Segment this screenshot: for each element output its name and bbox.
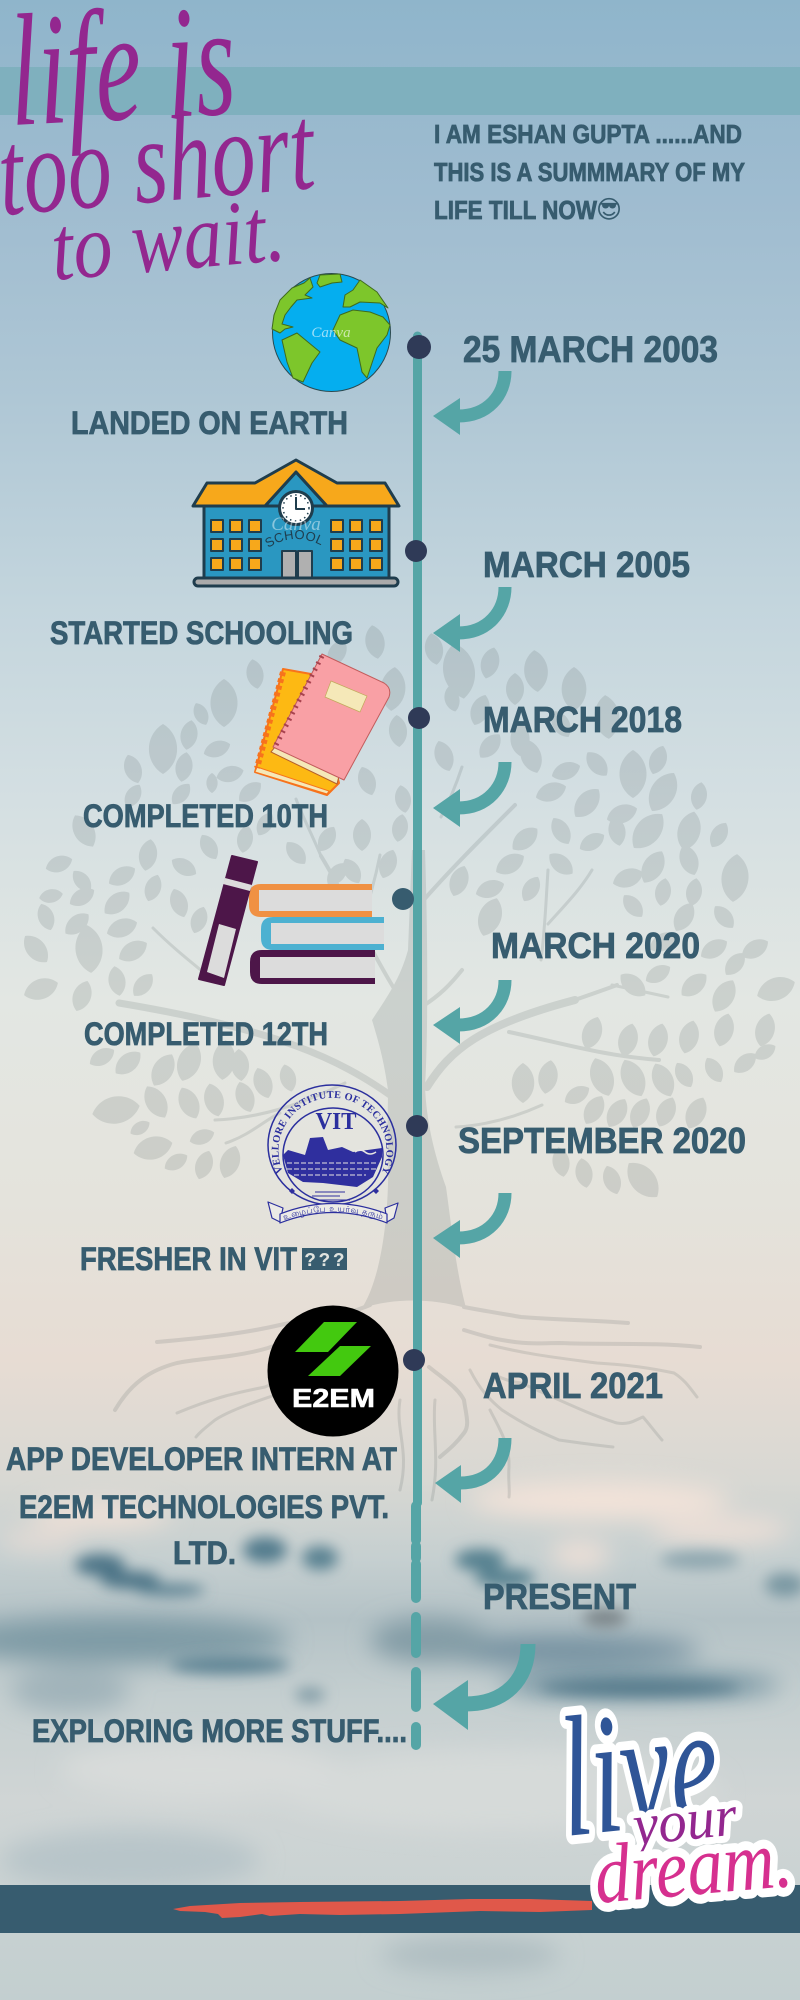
label: app developer intern: LTD. — [173, 1535, 236, 1571]
arrow: 2021 — [435, 1438, 505, 1503]
icon: VIT logo: VELLORE INSTITUTE OF TECHNOLOGY — [272, 1091, 394, 1175]
icon: school: SCHOOL — [265, 530, 322, 547]
tree trunk — [362, 850, 466, 1308]
arrow: present — [433, 1644, 528, 1730]
tree leaves — [18, 624, 799, 1205]
timeline line — [416, 336, 418, 1745]
tree branches — [119, 767, 668, 1143]
intro text: THIS IS A SUMMMARY OF MY — [434, 157, 745, 187]
arrow: 2020 — [433, 980, 505, 1044]
label: exploring more stuff: EXPLORING MORE STUFF.... — [32, 1713, 407, 1749]
top teal band — [0, 67, 800, 115]
date: March 2018: MARCH 2018 — [483, 699, 682, 740]
icon: VIT logo — [267, 1084, 399, 1224]
date: April 2021: APRIL 2021 — [483, 1365, 663, 1406]
icon: E2EM logo — [268, 1306, 398, 1436]
icon: globe — [272, 274, 390, 392]
icon: VIT logo: உழைப்பே உயர்வு தரும் — [284, 1206, 382, 1220]
intro text: 😎 — [596, 195, 622, 224]
sticker: live your dream: your — [625, 1782, 740, 1858]
bottom bar — [0, 1885, 800, 1933]
date: March 2005: MARCH 2005 — [483, 544, 690, 585]
arrow: 2003 — [433, 371, 505, 435]
icon: VIT logo: VIT — [316, 1109, 356, 1135]
label: fresher in VIT: FRESHER IN VIT — [80, 1241, 297, 1277]
label: completed 12th: COMPLETED 12TH — [84, 1016, 328, 1052]
date: present: PRESENT — [483, 1576, 636, 1617]
arrow: 2018 — [433, 762, 505, 827]
icon: school — [192, 458, 401, 588]
label: completed 10th: COMPLETED 10TH — [83, 798, 328, 834]
red brush stroke — [173, 1899, 592, 1918]
icon: E2EM logo: E2EM — [292, 1383, 375, 1413]
label: landed on earth: LANDED ON EARTH — [71, 405, 348, 441]
date: March 2020: MARCH 2020 — [491, 925, 700, 966]
date: September 2020: SEPTEMBER 2020 — [458, 1120, 746, 1161]
icon: notebooks — [255, 654, 390, 795]
intro text: I AM ESHAN GUPTA ......AND — [434, 119, 742, 149]
label: fresher in VIT: ??? — [304, 1250, 344, 1272]
label: app developer intern — [6, 1441, 397, 1571]
timeline dot: March 2018 — [408, 707, 430, 729]
title: life is too short to wait: too short — [0, 80, 321, 242]
intro text: LIFE TILL NOW — [434, 195, 597, 225]
title: life is too short to wait — [0, 0, 321, 300]
icon: stack of books — [199, 856, 384, 985]
arrow: 2005 — [433, 587, 505, 652]
timeline dot: 25 March 2003 — [407, 335, 431, 359]
icon: school: Canva — [271, 514, 321, 535]
arrow: 2020 September — [433, 1193, 505, 1258]
timeline dot: March 2020 — [392, 888, 414, 910]
label: app developer intern: APP DEVELOPER INTERN AT — [6, 1441, 397, 1477]
label: app developer intern: E2EM TECHNOLOGIES PVT. — [19, 1489, 389, 1525]
background tree — [18, 624, 799, 1500]
background: clouds — [0, 1482, 800, 1973]
date: 25 March 2003: 25 MARCH 2003 — [463, 329, 718, 370]
intro text — [434, 119, 745, 225]
tree roots — [115, 1305, 700, 1500]
icon: globe: Canva — [311, 325, 351, 341]
timeline dot: April 2021 — [403, 1349, 425, 1371]
title: life is too short to wait: to wait. — [47, 178, 289, 300]
timeline dot: September 2020 — [406, 1115, 428, 1137]
label: started schooling: STARTED SCHOOLING — [50, 615, 353, 651]
timeline dot: March 2005 — [405, 540, 427, 562]
